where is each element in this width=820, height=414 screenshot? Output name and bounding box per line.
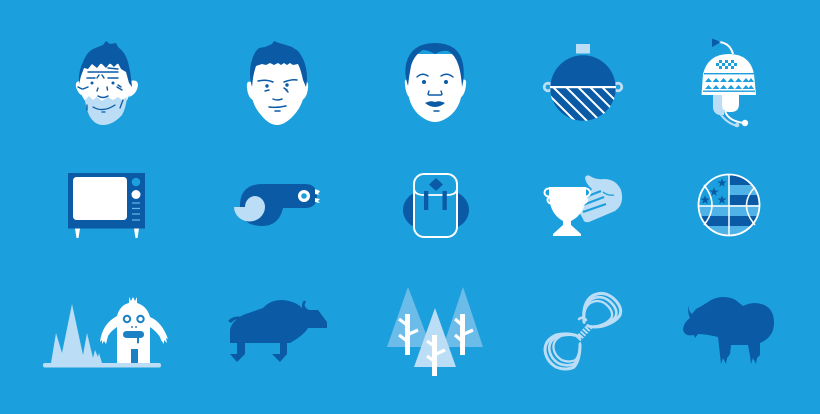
icon: whistle	[234, 184, 320, 226]
icon: flag basketball	[698, 174, 760, 236]
icon: coiled rope	[545, 293, 621, 369]
icon: backpack	[403, 174, 469, 237]
icon: trophy and hand	[544, 175, 622, 236]
icon: knit hat with tassel	[702, 38, 756, 127]
icon: old wrinkled face	[76, 41, 138, 125]
icon: snowy pine trees	[387, 287, 483, 376]
icon: flag stars	[700, 178, 727, 204]
icon: bison	[683, 297, 774, 364]
icon: balding man face	[405, 43, 466, 122]
icon grid	[43, 38, 774, 376]
icon: pot with lid	[542, 44, 624, 121]
icon: water buffalo	[228, 300, 327, 362]
icon: retro television	[68, 173, 145, 238]
icon: yeti and ice peaks	[43, 297, 168, 368]
icon: young man face	[247, 41, 308, 125]
